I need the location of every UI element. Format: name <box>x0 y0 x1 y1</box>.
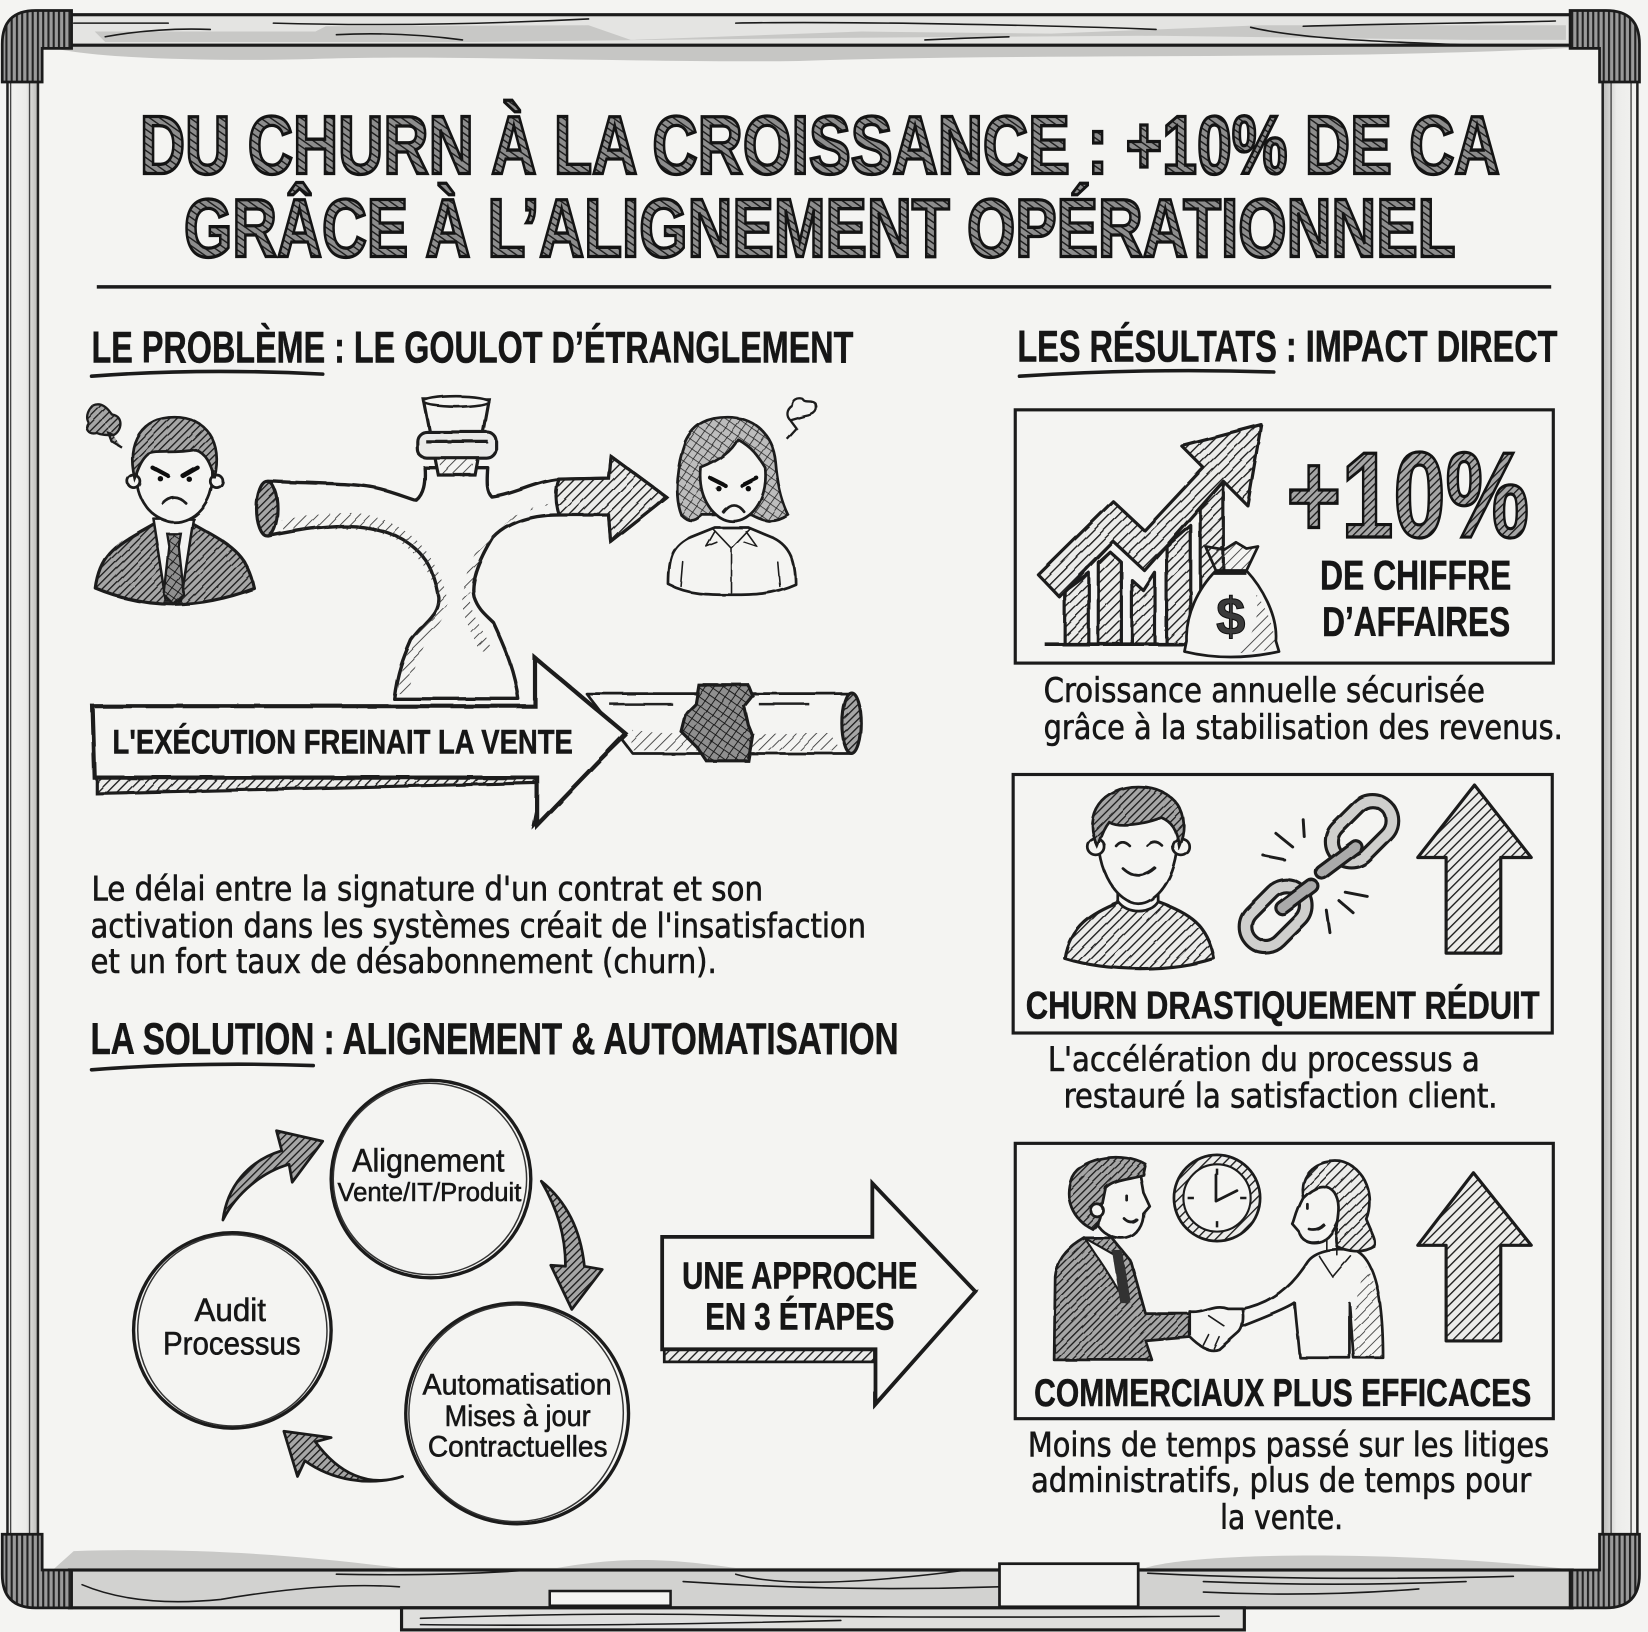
title <box>140 98 1500 274</box>
problem text: Le délai entre la signature d'un contrat et son <box>92 870 763 909</box>
icon: up arrow <box>1418 785 1531 953</box>
panel: churn <box>1013 774 1552 1033</box>
step: alignement: Alignement <box>352 1143 505 1179</box>
stat label <box>1320 552 1511 645</box>
panel: chiffre d'affaires <box>1015 410 1553 663</box>
step: alignement <box>321 1071 539 1287</box>
caption: moins de temps: Moins de temps passé sur les litiges <box>1028 1426 1549 1465</box>
step: audit processus: Audit <box>195 1292 266 1328</box>
step: automatisation <box>395 1291 637 1535</box>
caption: accélération: L'accélération du processus a <box>1048 1040 1480 1079</box>
step: automatisation: Mises à jour <box>445 1400 591 1433</box>
step: automatisation: Automatisation <box>423 1369 612 1402</box>
icon: rising chart <box>1038 425 1261 644</box>
icon: smiling man <box>1065 787 1214 969</box>
caption: accélération: restauré la satisfaction client. <box>1064 1077 1498 1116</box>
heading: le problème <box>92 323 853 376</box>
label: l'exécution freinait la vente: L'EXÉCUTION FREINAIT LA VENTE <box>113 721 573 761</box>
arrow: audit to alignement <box>223 1131 323 1220</box>
caption: croissance <box>1044 671 1563 747</box>
arrow: automatisation to audit <box>284 1431 403 1481</box>
caption: moins de temps <box>1028 1426 1549 1537</box>
problem text: et un fort taux de désabonnement (churn). <box>90 942 717 981</box>
panel: commerciaux <box>1015 1143 1553 1419</box>
step: automatisation: Contractuelles <box>428 1431 608 1464</box>
icon: anger cloud right <box>787 399 816 439</box>
stat label: DE CHIFFRE <box>1320 552 1511 599</box>
icon: up arrow <box>1418 1173 1531 1341</box>
step: audit processus <box>123 1220 342 1441</box>
problem text <box>90 870 866 981</box>
stat label: D’AFFAIRES <box>1322 598 1510 645</box>
caption: moins de temps: la vente. <box>1220 1498 1343 1537</box>
icon: angry woman <box>668 417 796 595</box>
arrow: une approche en 3 étapes: UNE APPROCHE <box>682 1255 918 1297</box>
icon: bottle and pipes <box>257 396 666 699</box>
icon: salesman and client handshake <box>1054 1157 1383 1360</box>
arrow: l'exécution freinait la vente <box>93 658 625 825</box>
icon: money bag: $ <box>1216 588 1245 647</box>
stat: +10%: +10% <box>1286 427 1529 563</box>
cycle diagram <box>123 1071 637 1535</box>
heading: la solution: LA SOLUTION : ALIGNEMENT & AUTOMATISATION <box>90 1015 899 1064</box>
step: audit processus: Processus <box>163 1326 301 1362</box>
heading: le problème: LE PROBLÈME : LE GOULOT D’ÉTRANGLEMENT <box>92 323 853 373</box>
caption: moins de temps: administratifs, plus de temps pour <box>1031 1461 1532 1500</box>
icon: anger cloud left <box>87 404 122 448</box>
arrow: une approche en 3 étapes: EN 3 ÉTAPES <box>705 1296 894 1338</box>
icon: broken chain <box>1237 793 1401 955</box>
caption: croissance: Croissance annuelle sécurisée <box>1044 671 1485 710</box>
illustration: bottleneck <box>87 396 861 825</box>
problem text: activation dans les systèmes créait de l'insatisfaction <box>90 906 866 945</box>
caption: croissance: grâce à la stabilisation des revenus. <box>1044 708 1563 747</box>
icon: right pipe with tangle <box>587 685 861 761</box>
arrow: alignement to automatisation <box>541 1181 602 1309</box>
icon: angry man <box>96 417 254 604</box>
arrow: une approche en 3 étapes <box>662 1183 975 1406</box>
heading: la solution <box>90 1015 899 1070</box>
icon: money bag <box>1184 542 1279 657</box>
step: alignement: Vente/IT/Produit <box>337 1177 522 1207</box>
caption: accélération <box>1048 1040 1498 1116</box>
icon: clock <box>1174 1155 1260 1241</box>
